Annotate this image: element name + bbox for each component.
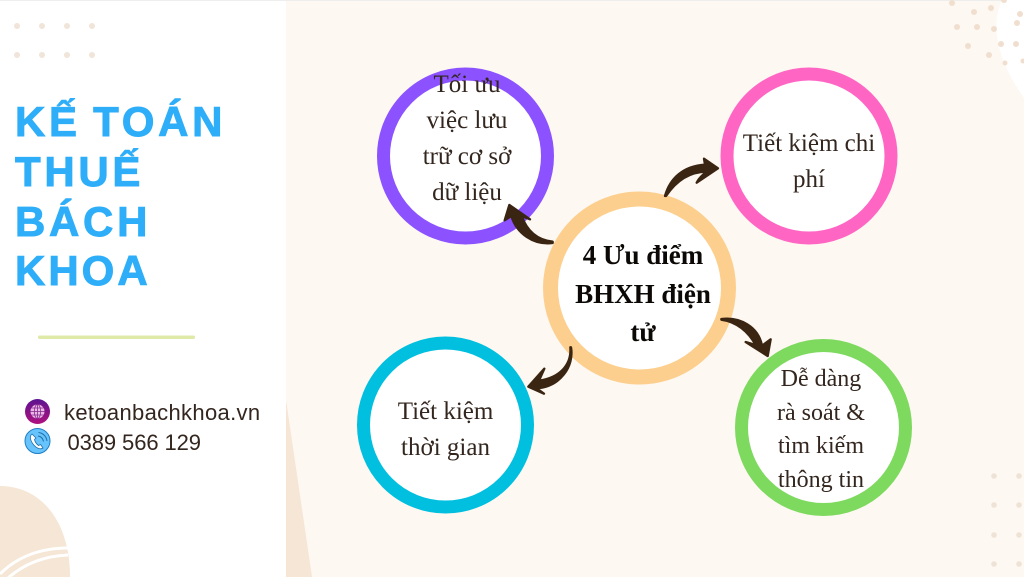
circle: Tiết kiệm chi phí: Tiết kiệm chi [743,130,875,157]
circle: center 4 Ưu điểm BHXH điện tử [550,199,728,377]
circle: Tối ưu việc lưu trữ cơ sở dữ liệu: Tối ưu [433,71,501,98]
contact: website [25,399,260,425]
title: KHOA [15,247,151,294]
arrow: center to top-right [665,159,718,196]
arrow: center to top-left [505,205,553,243]
circle: Tiết kiệm chi phí: phí [793,166,825,193]
circle: Tiết kiệm thời gian [364,343,528,507]
title [15,98,226,294]
circle: Dễ dàng rà soát & tìm kiếm thông tin [742,346,906,510]
circle: center 4 Ưu điểm BHXH điện tử: BHXH điện [575,279,711,309]
arrow: center to bottom-right [721,319,771,356]
circle: Dễ dàng rà soát & tìm kiếm thông tin: thông tin [778,467,864,493]
circle: Dễ dàng rà soát & tìm kiếm thông tin: Dễ dàng [781,366,861,392]
circle: Tiết kiệm thời gian: thời gian [401,434,490,461]
circle: Tiết kiệm thời gian: Tiết kiệm [398,398,494,425]
circle: center 4 Ưu điểm BHXH điện tử: tử [630,317,656,347]
decoration: bottom-right dots [991,473,1022,567]
circle: Dễ dàng rà soát & tìm kiếm thông tin: tìm kiếm [778,433,864,459]
circle: Tiết kiệm chi phí [727,74,891,238]
decoration: top-right white blob and dots [949,0,1024,98]
circle: Tối ưu việc lưu trữ cơ sở dữ liệu: việc lưu [427,107,508,134]
phone text: 0389 566 129 [68,430,201,455]
circle: Tối ưu việc lưu trữ cơ sở dữ liệu [384,71,548,238]
contact: phone [25,428,201,455]
circle: Dễ dàng rà soát & tìm kiếm thông tin: rà soát & [777,400,865,426]
decoration: beige triangle [286,400,312,577]
website text: ketoanbachkhoa.vn [64,400,260,425]
title: BÁCH [15,198,151,245]
decoration: bottom-left semicircle with arcs [0,486,70,577]
circle: Tối ưu việc lưu trữ cơ sở dữ liệu: trữ cơ sở [423,143,512,170]
title: THUẾ [15,148,144,195]
icon: phone [25,428,50,454]
circle: center 4 Ưu điểm BHXH điện tử: 4 Ưu điểm [583,240,704,270]
decoration: sidebar dot grid [14,23,95,58]
title: KẾ TOÁN [15,98,226,145]
arrow: center to bottom-left [528,347,571,394]
icon: globe [25,399,50,424]
circle: Tối ưu việc lưu trữ cơ sở dữ liệu: dữ liệu [432,179,502,206]
divider line [38,336,195,339]
